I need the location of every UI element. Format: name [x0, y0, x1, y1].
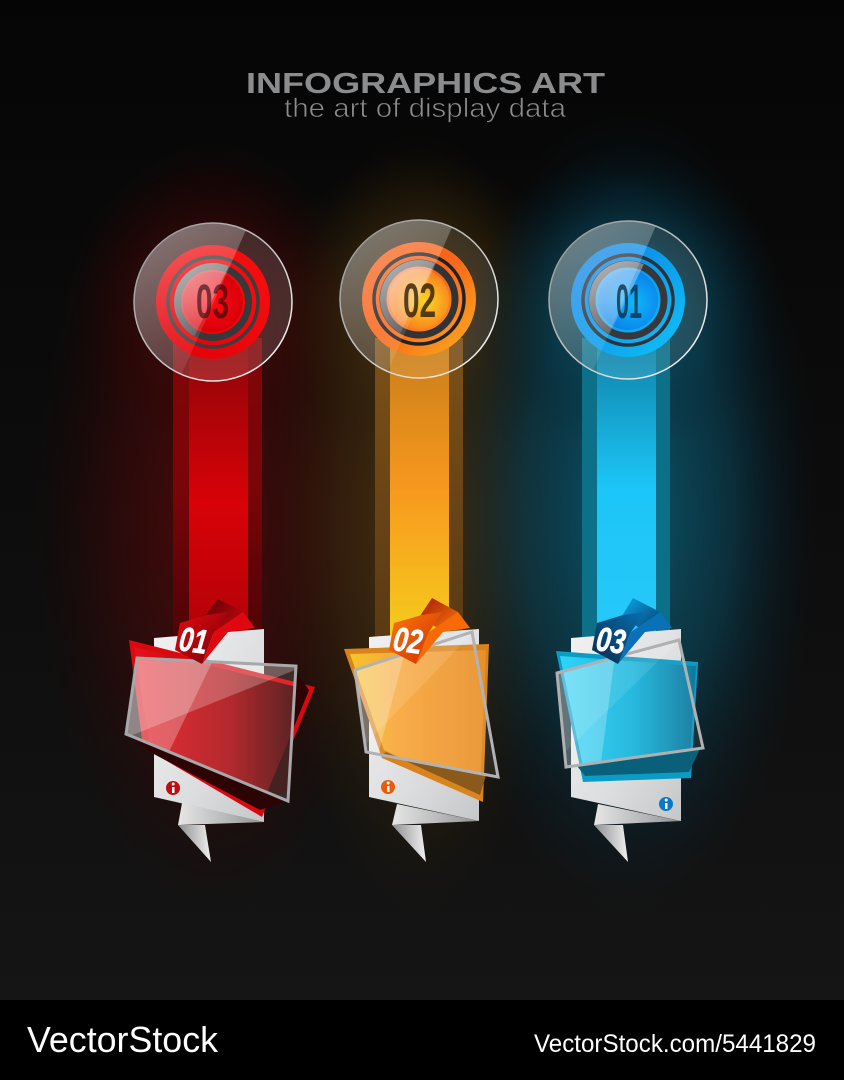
corner tag: blue 03: 03 — [594, 620, 628, 662]
glass panel: orange — [350, 625, 498, 777]
corner tag: blue 03 — [592, 598, 672, 664]
glass panel: blue — [550, 630, 703, 770]
corner tag: orange 02: 02 — [391, 620, 425, 662]
icon: info — [381, 780, 395, 794]
glow: red column — [33, 130, 393, 910]
corner tag: orange 02 — [389, 598, 470, 664]
number 02: 02 — [403, 275, 436, 328]
title: INFOGRAPHICS ART — [246, 68, 605, 100]
glass button: blue 01: 01 — [616, 276, 642, 329]
origami banner: red — [126, 629, 315, 862]
glass button: blue 01 — [548, 220, 708, 380]
origami banner: orange — [344, 629, 489, 862]
glow: blue column — [438, 110, 818, 910]
footer logo: VectorStock — [27, 1019, 219, 1060]
corner tag: red 01 — [175, 599, 255, 664]
ribbon strip: red — [173, 338, 262, 638]
ribbon strip: orange — [375, 338, 463, 638]
glass button: red 03 — [133, 222, 293, 382]
number 03: 03 — [196, 276, 229, 329]
column: blue — [535, 205, 707, 862]
corner tag: red 01: 01 — [177, 620, 210, 662]
footer band — [0, 1000, 844, 1080]
glass button: orange 02 — [339, 219, 499, 379]
column: red — [120, 210, 315, 862]
glass panel: red — [120, 650, 300, 801]
icon: info — [659, 797, 673, 811]
glow: orange column — [269, 130, 569, 910]
icon: info — [166, 781, 180, 795]
subtitle: the art of display data — [284, 93, 567, 123]
ribbon strip: blue — [582, 338, 670, 638]
origami banner: blue — [556, 629, 700, 862]
column: orange — [325, 205, 498, 862]
footer url: VectorStock.com/5441829 — [534, 1030, 816, 1058]
